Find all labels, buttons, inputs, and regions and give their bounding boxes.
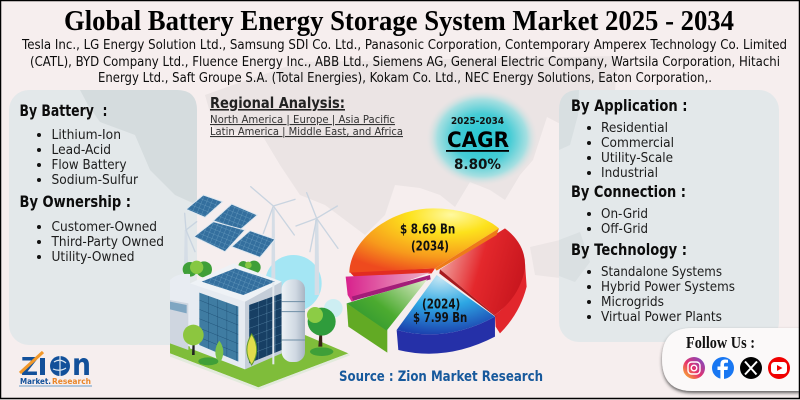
icon: X	[740, 357, 762, 379]
CAGR badge	[426, 90, 538, 186]
value label: 2024	[413, 297, 467, 326]
3D pie chart	[346, 208, 527, 354]
slice: yellow	[349, 208, 499, 277]
heading: by ownership: By Ownership :	[20, 192, 131, 211]
list: connections: Off-Grid	[601, 221, 648, 237]
logo: Zion Market Research	[19, 348, 92, 386]
value label: 2024: $ 7.99 Bn	[413, 311, 467, 326]
heading: by technology: By Technology :	[571, 240, 687, 259]
heading: by battery: By Battery :	[20, 101, 108, 120]
regional analysis: North America | Europe | Asia Pacific	[210, 113, 395, 126]
list: ownership types: Customer-Owned	[52, 219, 157, 235]
value label: 2034	[400, 222, 455, 254]
left annex	[170, 274, 190, 350]
list: connections: On-Grid	[601, 206, 648, 222]
shrubs	[183, 261, 261, 277]
list: technologies: Standalone Systems	[601, 264, 722, 280]
logo: Zion Market Research: Market.	[20, 377, 51, 386]
value label: 2024: (2024)	[422, 297, 460, 312]
heading: by application: By Application :	[571, 96, 688, 115]
follow us box: Follow Us :	[686, 333, 755, 352]
list: battery types: Flow Battery	[52, 157, 127, 173]
panel: right segments	[559, 90, 779, 342]
list: technologies: Microgrids	[601, 294, 664, 310]
source: Source : Zion Market Research	[339, 369, 543, 385]
list: battery types: Lithium-Ion	[52, 127, 121, 143]
logo: Zion Market Research: Research	[52, 377, 91, 386]
heading: by connection: By Connection :	[571, 182, 686, 201]
list: ownership types: Utility-Owned	[52, 249, 134, 265]
list: battery types: Sodium-Sulfur	[52, 172, 138, 188]
list: battery types	[37, 127, 138, 188]
regional analysis: Latin America | Middle East, and Africa	[210, 125, 403, 138]
icon: instagram	[683, 357, 705, 379]
wind turbines	[184, 187, 338, 295]
slice: blue	[397, 275, 495, 354]
slice: pink	[346, 273, 431, 302]
illustration: building, solar panels and wind turbines	[170, 187, 350, 390]
value label: 2034: (2034)	[411, 239, 449, 254]
company list: Energy Ltd., Saft Groupe S.A. (Total Energies), Kokam Co. Ltd., NEC Energy Solutions, Eaton Corporation,.	[98, 70, 712, 86]
list: ownership types	[37, 219, 164, 265]
list: technologies: Virtual Power Plants	[601, 309, 722, 325]
value label: 2034: $ 8.69 Bn	[400, 222, 455, 237]
list: technologies: Hybrid Power Systems	[601, 279, 735, 295]
solar panels	[186, 195, 275, 257]
logo: Zion Market Research: Z	[21, 352, 38, 381]
trees	[183, 307, 336, 365]
CAGR badge: 8.80%	[454, 157, 501, 173]
follow us box	[662, 328, 800, 391]
slice: green	[347, 279, 427, 353]
list: battery types: Lead-Acid	[52, 142, 111, 158]
title: Global Battery Energy Storage System Market 2025 - 2034	[64, 5, 734, 37]
CAGR badge: CAGR	[447, 128, 509, 152]
regional analysis: Regional Analysis:	[210, 94, 345, 112]
storage cylinder	[282, 279, 305, 362]
list: applications: Utility-Scale	[601, 150, 673, 166]
icon: facebook	[712, 357, 734, 379]
list: connections	[587, 206, 648, 237]
list: applications	[587, 120, 674, 181]
list: applications: Commercial	[601, 135, 674, 151]
regional analysis	[210, 94, 403, 138]
list: applications: Industrial	[601, 165, 658, 181]
building	[190, 283, 245, 369]
company list	[21, 37, 787, 86]
list: applications: Residential	[601, 120, 668, 136]
list: technologies	[587, 264, 735, 325]
logo: Zion Market Research: n	[72, 348, 91, 383]
list: ownership types: Third-Party Owned	[51, 234, 164, 250]
panel: left segments	[9, 90, 197, 345]
icon: youtube	[768, 357, 790, 379]
slice: red	[439, 228, 527, 333]
CAGR badge: 2025-2034	[451, 116, 504, 127]
